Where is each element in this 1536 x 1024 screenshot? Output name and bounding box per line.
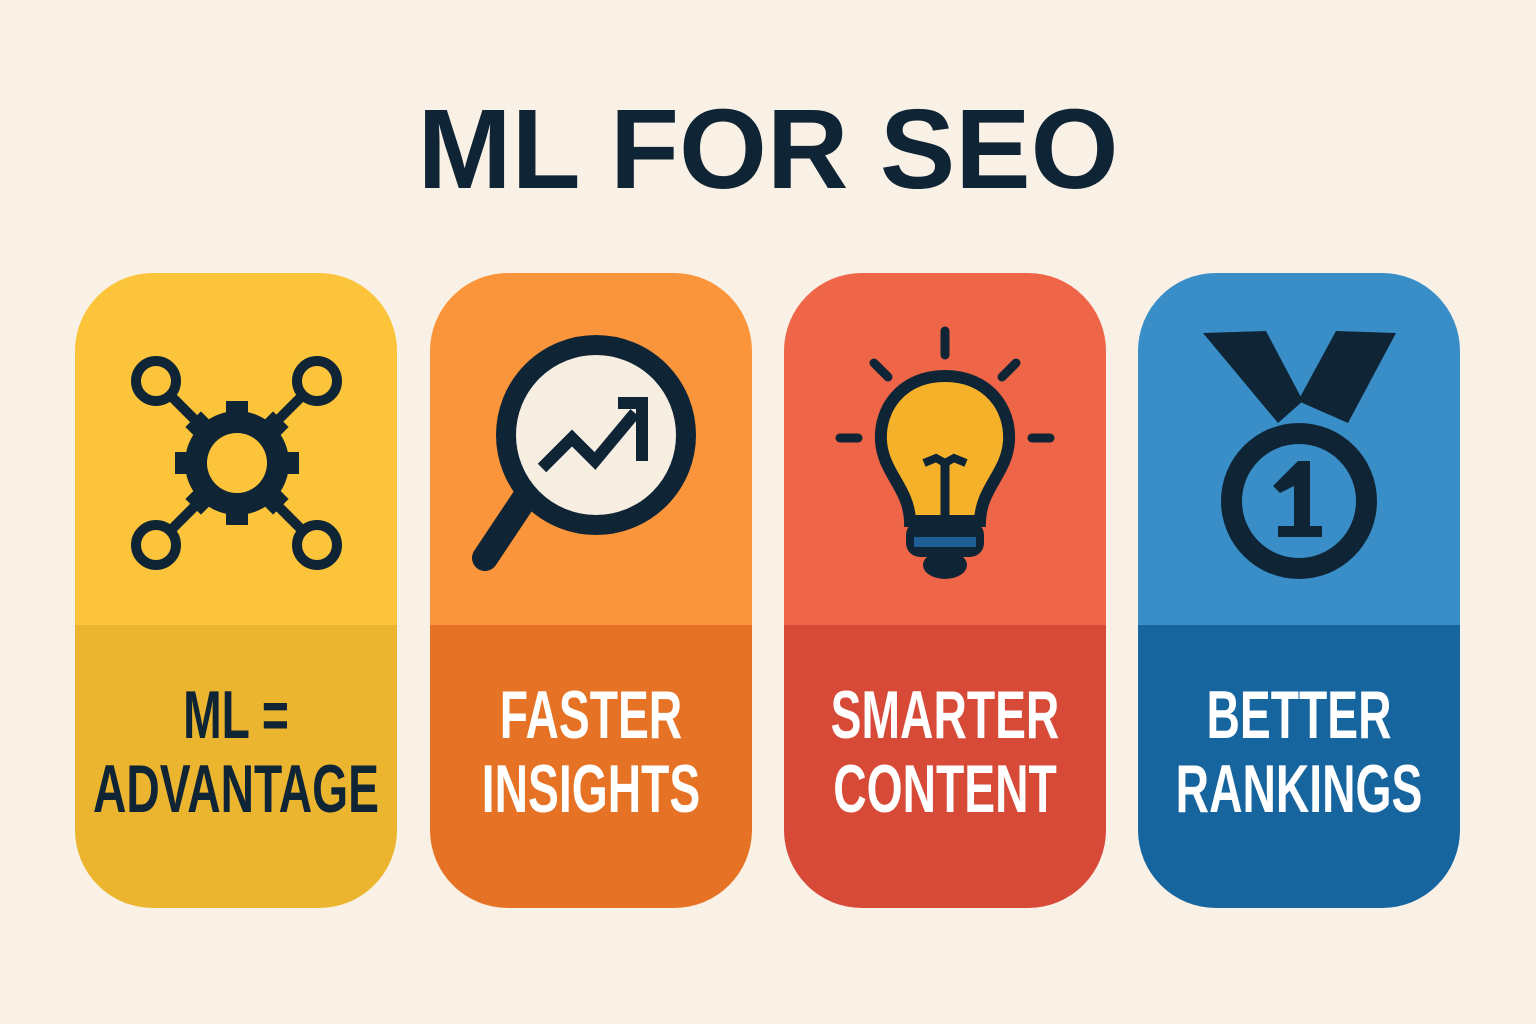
label: [93, 677, 379, 827]
panel: smarter content: [784, 273, 1106, 908]
label: ML =: [183, 677, 289, 753]
label: SMARTER: [831, 677, 1059, 753]
label: [1176, 677, 1422, 827]
label: RANKINGS: [1176, 751, 1422, 827]
label: INSIGHTS: [482, 751, 700, 827]
label: BETTER: [1207, 677, 1391, 753]
icon: medal: [1203, 331, 1396, 579]
panel: better rankings: [1138, 273, 1460, 908]
icon: light bulb: [836, 326, 1054, 579]
label: ADVANTAGE: [93, 751, 379, 827]
label: CONTENT: [833, 751, 1057, 827]
label: FASTER: [500, 677, 682, 753]
panel: ml advantage: [75, 273, 397, 908]
title: ML FOR SEO: [417, 86, 1119, 212]
label: [482, 677, 700, 827]
label: [831, 677, 1059, 827]
icon: gear network: [131, 356, 342, 570]
panel: faster insights: [430, 273, 752, 908]
icon: magnifier with trend: [472, 335, 696, 571]
